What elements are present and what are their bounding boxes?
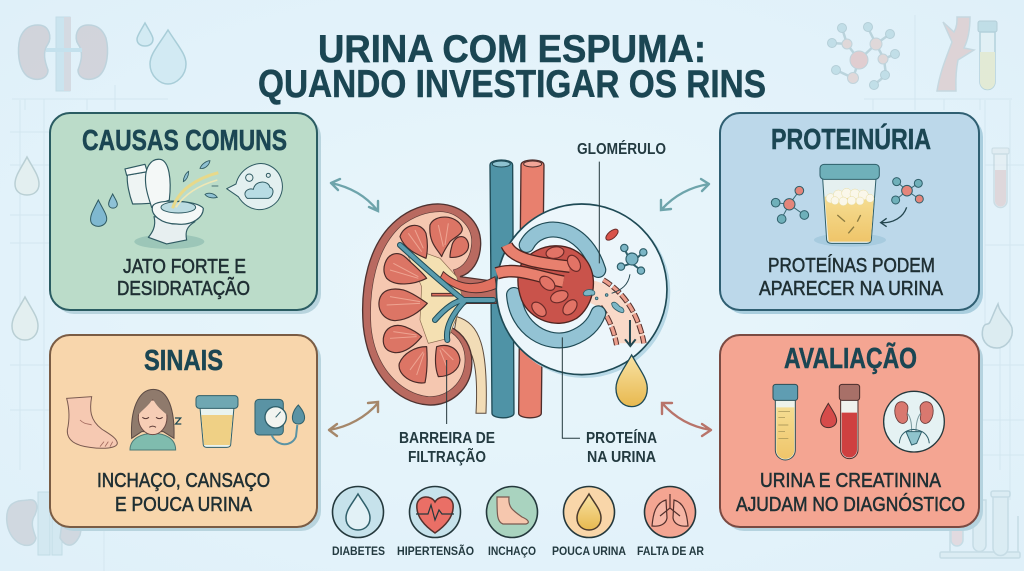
text: inchaco cansaco: INCHAÇO, CANSAÇO — [97, 470, 270, 492]
label: proteina na urina — [586, 428, 657, 466]
title: URINA COM ESPUMA: — [318, 28, 706, 71]
arrow: proteinuria to kidney — [661, 179, 709, 210]
icon: urine cup with proteins — [771, 164, 923, 247]
text: jato forte: DESIDRATAÇÃO — [117, 276, 250, 300]
central kidney diagram — [363, 160, 670, 438]
text: urina e creatinina — [736, 470, 965, 516]
title: QUANDO INVESTIGAR OS RINS — [258, 63, 766, 106]
background icon: molecule top right — [828, 22, 900, 90]
protein drop — [616, 355, 647, 407]
tubule — [585, 280, 646, 343]
title — [258, 28, 766, 106]
panel: proteinuria — [720, 113, 983, 314]
text: urina e creatinina: AJUDAM NO DIAGNÓSTICO — [736, 493, 965, 516]
background icon: drop left — [15, 157, 39, 195]
heading: avaliacao: AVALIAÇÃO — [784, 341, 917, 375]
heading: causas comuns: CAUSAS COMUNS — [82, 125, 287, 157]
symptom icon: inchaco — [486, 486, 538, 558]
text: jato forte — [117, 256, 250, 300]
background icon: kidneys top left — [18, 17, 108, 91]
text: proteinas podem — [759, 254, 944, 300]
symptom icon: diabetes — [332, 486, 385, 558]
symptom icon: diabetes: DIABETES — [332, 544, 385, 558]
background icon: drops top left — [137, 23, 186, 84]
heading: proteinuria: PROTEINÚRIA — [771, 122, 931, 156]
text: inchaco cansaco — [97, 470, 270, 516]
leader lines — [447, 162, 599, 438]
text: inchaco cansaco: E POUCA URINA — [115, 494, 253, 516]
icons: foot, tired person, urine cup, blood pressure monitor — [67, 389, 305, 450]
magnifier with glomerulus — [496, 204, 670, 378]
label: barreira de filtracao — [399, 430, 495, 466]
panel: causas comuns — [50, 113, 321, 314]
background icon: drop left lower — [12, 297, 38, 340]
background icon: flame right — [982, 304, 1012, 348]
symptom icon: hipertensao: HIPERTENSÃO — [397, 543, 474, 558]
heading: sinais: SINAIS — [144, 345, 223, 377]
label: barreira de filtracao: FILTRAÇÃO — [408, 446, 486, 466]
symptom icon: hipertensao — [397, 486, 474, 558]
background icon: test tube top right — [978, 21, 997, 90]
background icon: kidneys bottom left — [7, 492, 82, 555]
label: proteina na urina: NA URINA — [587, 449, 656, 466]
arrow: sinais to kidney — [329, 402, 378, 436]
protein particles — [583, 290, 624, 313]
text: proteinas podem: PROTEÍNAS PODEM — [768, 254, 935, 277]
symptom icon: pouca urina — [552, 486, 626, 558]
background icon: vessel top right — [937, 17, 974, 91]
label: proteina na urina: PROTEÍNA — [586, 428, 657, 447]
ureter — [453, 317, 486, 413]
symptom icon: pouca urina: POUCA URINA — [552, 544, 626, 558]
vein and artery — [490, 160, 544, 418]
molecule — [617, 244, 647, 274]
panel: sinais — [50, 335, 321, 531]
text: jato forte: JATO FORTE E — [123, 256, 246, 278]
symptom icon: inchaco: INCHAÇO — [488, 544, 536, 558]
kidney — [363, 204, 497, 405]
label: barreira de filtracao: BARREIRA DE — [399, 430, 495, 447]
background icon: test tubes bottom right — [940, 491, 1020, 558]
symptom icon: falta de ar: FALTA DE AR — [637, 544, 704, 558]
icons: urine tube, blood tube, kidneys — [773, 384, 944, 460]
arrow: causas to kidney — [331, 179, 378, 211]
background icon: test tube right — [992, 148, 1009, 208]
text: urina e creatinina: URINA E CREATININA — [760, 470, 942, 492]
glomerulus — [518, 246, 593, 323]
capsule — [514, 230, 598, 340]
symptom icon: falta de ar — [637, 486, 704, 558]
panel: avaliacao — [720, 335, 983, 531]
label: glomerulo: GLOMÉRULO — [577, 139, 666, 158]
arrow: avaliacao to kidney — [662, 403, 711, 436]
text: proteinas podem: APARECER NA URINA — [759, 278, 944, 300]
icon: toilet with stream and foam — [91, 159, 282, 249]
